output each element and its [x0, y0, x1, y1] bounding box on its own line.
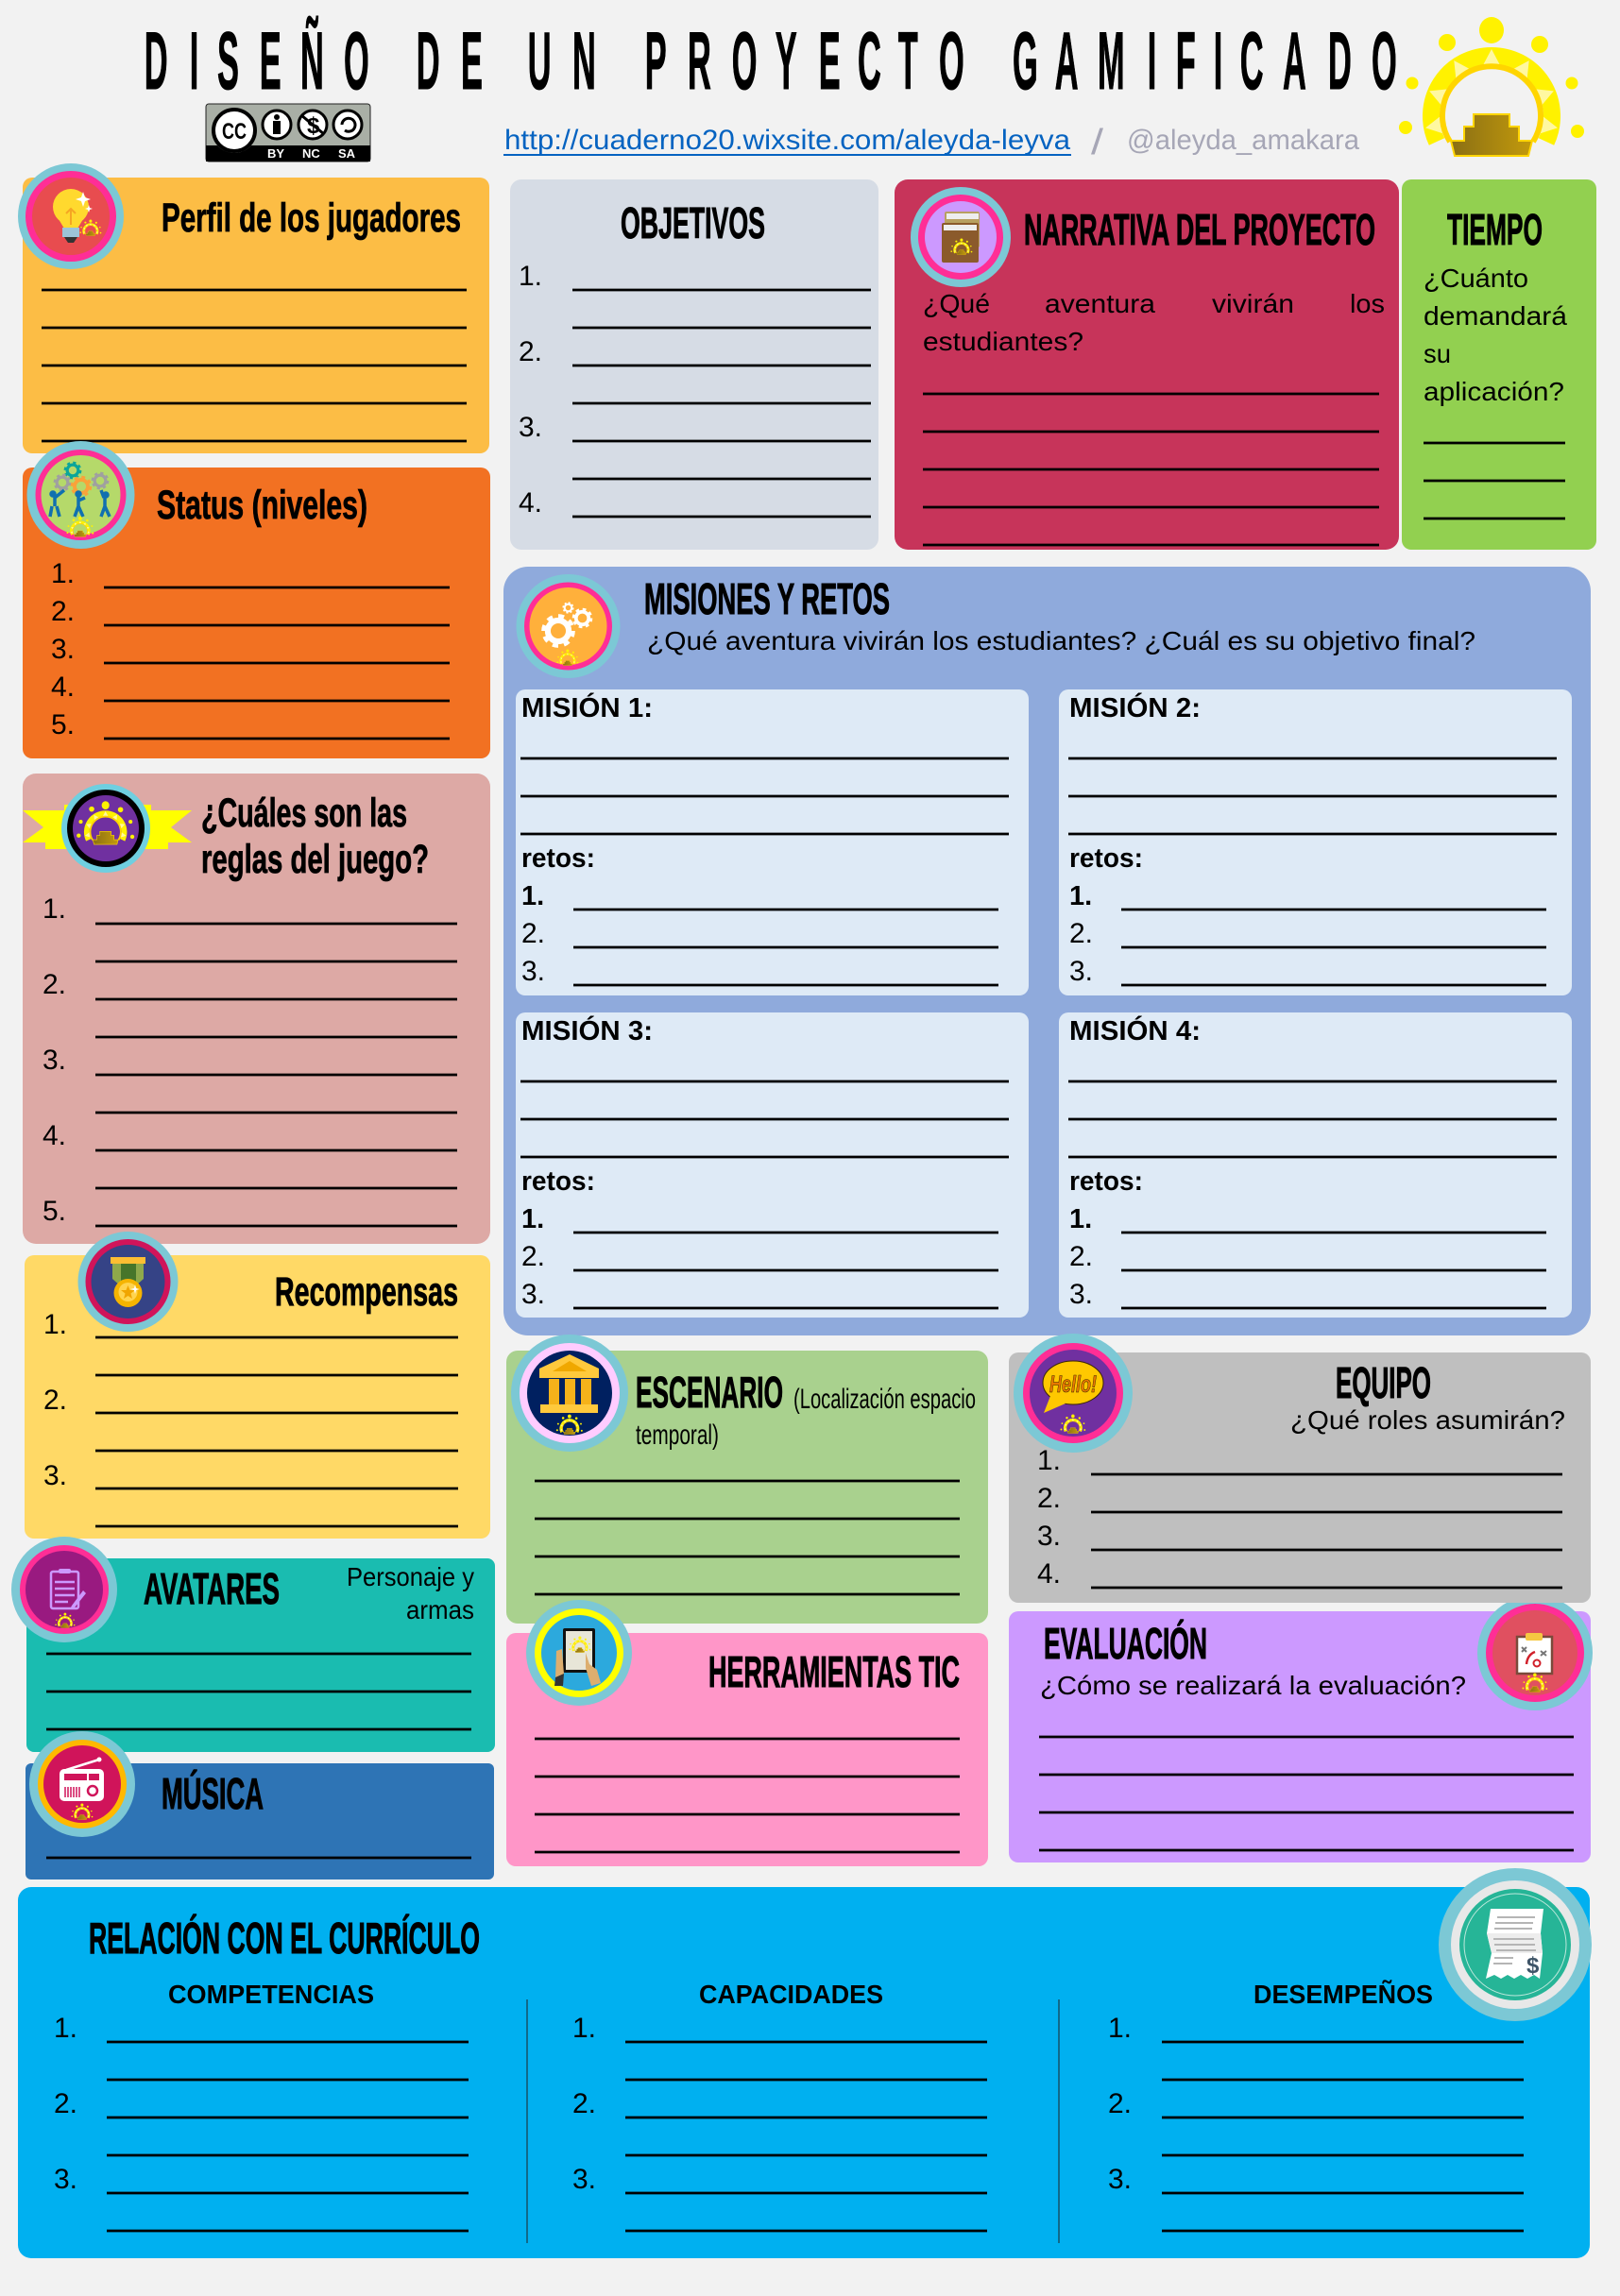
column: capacidades: CAPACIDADES	[699, 1980, 883, 2009]
icon: clipboard pencil	[11, 1537, 117, 1642]
panel: perfil de los jugadores	[23, 178, 489, 453]
link: website url: http://cuaderno20.wixsite.com/aleyda-leyva	[504, 125, 1070, 156]
icon: creative commons badge: CC	[222, 119, 247, 145]
card: mision 1: retos:	[521, 843, 595, 874]
text: tiempo question: su	[1424, 339, 1451, 368]
text: tiempo question	[1424, 264, 1567, 406]
text: misiones question: ¿Qué aventura vivirán los estudiantes? ¿Cuál es su objetivo final?	[647, 626, 1475, 655]
panel: reglas del juego: 1.	[43, 893, 66, 925]
panel: status niveles: 3.	[51, 634, 75, 665]
column: desempenos: 1.	[1108, 2013, 1132, 2044]
card: mision 2: 1.	[1069, 881, 1092, 911]
column: capacidades: 2.	[572, 2088, 596, 2119]
card: mision 3: 1.	[521, 1204, 544, 1234]
card: mision 2	[1059, 689, 1572, 995]
panel: reglas del juego	[23, 774, 490, 1244]
card: mision 3: 2.	[521, 1241, 545, 1272]
heading: perfil: Perfil de los jugadores	[162, 196, 461, 241]
text: narrativa question: estudiantes?	[923, 327, 1083, 356]
heading: reglas: ¿Cuáles son las	[201, 791, 407, 836]
panel: equipo: 1.	[1037, 1445, 1061, 1476]
heading: musica: MÚSICA	[162, 1769, 264, 1818]
text: narrativa question: ¿Qué	[923, 289, 990, 318]
card: mision 4: retos:	[1069, 1166, 1143, 1197]
icon: receipt: $	[1526, 1953, 1540, 1979]
icon: temple	[511, 1335, 628, 1452]
column: competencias: 1.	[54, 2013, 77, 2044]
panel: musica	[26, 1763, 494, 1879]
heading: equipo: EQUIPO	[1336, 1358, 1431, 1407]
icon: ribbon badge	[23, 784, 192, 873]
icon: strategy clipboard	[1477, 1595, 1593, 1710]
card: mision 4: 1.	[1069, 1204, 1092, 1234]
heading: avatares: AVATARES	[144, 1564, 280, 1613]
text: personaje y armas: Personaje y	[347, 1562, 474, 1591]
text: narrativa question: vivirán	[1212, 289, 1294, 318]
heading: objetivos: OBJETIVOS	[621, 198, 765, 247]
panel: reglas del juego: 4.	[43, 1120, 66, 1151]
panel: status niveles: 1.	[51, 558, 75, 589]
icon: hello speech bubble	[1014, 1334, 1133, 1453]
column: desempenos: DESEMPEÑOS	[1253, 1980, 1433, 2009]
panel: equipo	[1009, 1352, 1591, 1603]
panel: recompensas: 2.	[43, 1385, 67, 1416]
column: desempenos	[1108, 1980, 1524, 2231]
card: mision 3: retos:	[521, 1166, 595, 1197]
card: mision 3: MISIÓN 3:	[521, 1014, 653, 1046]
card: mision 3: 3.	[521, 1279, 545, 1310]
icon: team with gears	[26, 441, 134, 549]
text: narrativa question	[923, 289, 1385, 356]
panel: equipo: 4.	[1037, 1558, 1061, 1590]
column: competencias: 2.	[54, 2088, 77, 2119]
column: capacidades	[572, 1980, 987, 2231]
panel: objetivos: 3.	[519, 412, 542, 443]
panel: recompensas	[25, 1255, 490, 1539]
column: desempenos: 2.	[1108, 2088, 1132, 2119]
card: mision 1: 2.	[521, 918, 545, 949]
text: localizacion: (Localización espacio	[793, 1384, 976, 1415]
icon: medal	[77, 1232, 178, 1332]
heading: curriculo: RELACIÓN CON EL CURRÍCULO	[89, 1913, 480, 1963]
icon: gears	[516, 574, 620, 678]
card: mision 1: 1.	[521, 881, 544, 911]
icon: creative commons badge: $	[307, 113, 320, 139]
heading: reglas: reglas del juego?	[201, 837, 429, 882]
column: desempenos: 3.	[1108, 2164, 1132, 2195]
heading: tiempo: TIEMPO	[1447, 205, 1543, 254]
panel: objetivos: 4.	[519, 487, 542, 519]
card: mision 1: 3.	[521, 956, 545, 987]
panel: equipo: 2.	[1037, 1483, 1061, 1514]
card: mision 4: 2.	[1069, 1241, 1093, 1272]
heading: herramientas: HERRAMIENTAS TIC	[708, 1647, 960, 1696]
text: localizacion	[636, 1384, 976, 1451]
panel: equipo: 3.	[1037, 1521, 1061, 1552]
text: tiempo question: demandará	[1424, 301, 1567, 331]
card: mision 4	[1059, 1012, 1572, 1318]
icon: creative commons badge	[206, 104, 370, 162]
column: competencias: COMPETENCIAS	[168, 1980, 374, 2009]
heading: misiones: MISIONES Y RETOS	[644, 574, 890, 623]
card: mision 2: 3.	[1069, 956, 1093, 987]
text: equipo question: ¿Qué roles asumirán?	[1290, 1405, 1565, 1435]
text: narrativa question: los	[1350, 289, 1385, 318]
text: personaje y armas: armas	[406, 1595, 474, 1624]
heading: recompensas: Recompensas	[275, 1269, 458, 1315]
card: mision 4: MISIÓN 4:	[1069, 1014, 1201, 1046]
panel: relacion con el curriculo	[18, 1887, 1590, 2258]
panel: tiempo	[1402, 179, 1596, 550]
handle: twitter name: /	[1091, 123, 1104, 162]
column: capacidades: 1.	[572, 2013, 596, 2044]
panel: escenario	[506, 1351, 988, 1624]
panel: herramientas tic	[506, 1633, 988, 1866]
icon: sun logo	[1399, 17, 1584, 156]
card: mision 1	[516, 689, 1029, 995]
heading: escenario: ESCENARIO	[636, 1368, 783, 1417]
panel: avatares	[26, 1558, 495, 1752]
handle: twitter name	[1091, 123, 1359, 162]
panel: status niveles: 5.	[51, 709, 75, 740]
panel: misiones y retos	[503, 567, 1591, 1335]
panel: narrativa del proyecto	[895, 179, 1399, 550]
panel: reglas del juego: 3.	[43, 1045, 66, 1076]
panel: reglas del juego: 2.	[43, 969, 66, 1000]
panel: status niveles: 2.	[51, 596, 75, 627]
panel: objetivos	[510, 179, 878, 550]
card: mision 2: retos:	[1069, 843, 1143, 874]
text: localizacion: temporal)	[636, 1420, 719, 1451]
card: mision 4: 3.	[1069, 1279, 1093, 1310]
panel: status niveles: 4.	[51, 672, 75, 703]
text: tiempo question: ¿Cuánto	[1424, 264, 1528, 293]
panel: objetivos: 1.	[519, 261, 542, 292]
card: mision 1: MISIÓN 1:	[521, 691, 653, 723]
card: mision 3	[516, 1012, 1029, 1318]
icon: creative commons badge: BY	[267, 146, 284, 161]
icon: creative commons badge: NC	[302, 146, 320, 161]
heading: evaluacion: EVALUACIÓN	[1044, 1619, 1207, 1668]
title: DISEÑO DE UN PROYECTO GAMIFICADO	[145, 16, 1397, 106]
panel: status niveles	[23, 468, 490, 758]
icon: light bulb	[18, 163, 124, 269]
heading: status: Status (niveles)	[157, 483, 367, 528]
icon: receipt	[1439, 1868, 1592, 2021]
panel: reglas del juego: 5.	[43, 1196, 66, 1227]
panel: evaluacion	[1009, 1611, 1591, 1862]
card: mision 2: MISIÓN 2:	[1069, 691, 1201, 723]
heading: narrativa: NARRATIVA DEL PROYECTO	[1024, 205, 1375, 254]
card: mision 2: 2.	[1069, 918, 1093, 949]
panel: recompensas: 1.	[43, 1309, 67, 1340]
icon: radio	[29, 1731, 135, 1837]
icon: tablet	[526, 1600, 632, 1706]
text: evaluacion question: ¿Cómo se realizará la evaluación?	[1040, 1671, 1466, 1700]
panel: objetivos: 2.	[519, 336, 542, 367]
panel: recompensas: 3.	[43, 1460, 67, 1491]
handle: twitter name: @aleyda_amakara	[1127, 125, 1359, 156]
heading: reglas	[201, 791, 429, 882]
icon: books	[911, 187, 1011, 287]
icon: creative commons badge: SA	[338, 146, 356, 161]
column: competencias: 3.	[54, 2164, 77, 2195]
column: capacidades: 3.	[572, 2164, 596, 2195]
text: tiempo question: aplicación?	[1424, 377, 1564, 406]
icon: hello speech bubble: Hello!	[1049, 1371, 1097, 1398]
text: narrativa question: aventura	[1045, 289, 1155, 318]
column: competencias	[54, 1980, 469, 2231]
text: personaje y armas	[347, 1562, 474, 1624]
